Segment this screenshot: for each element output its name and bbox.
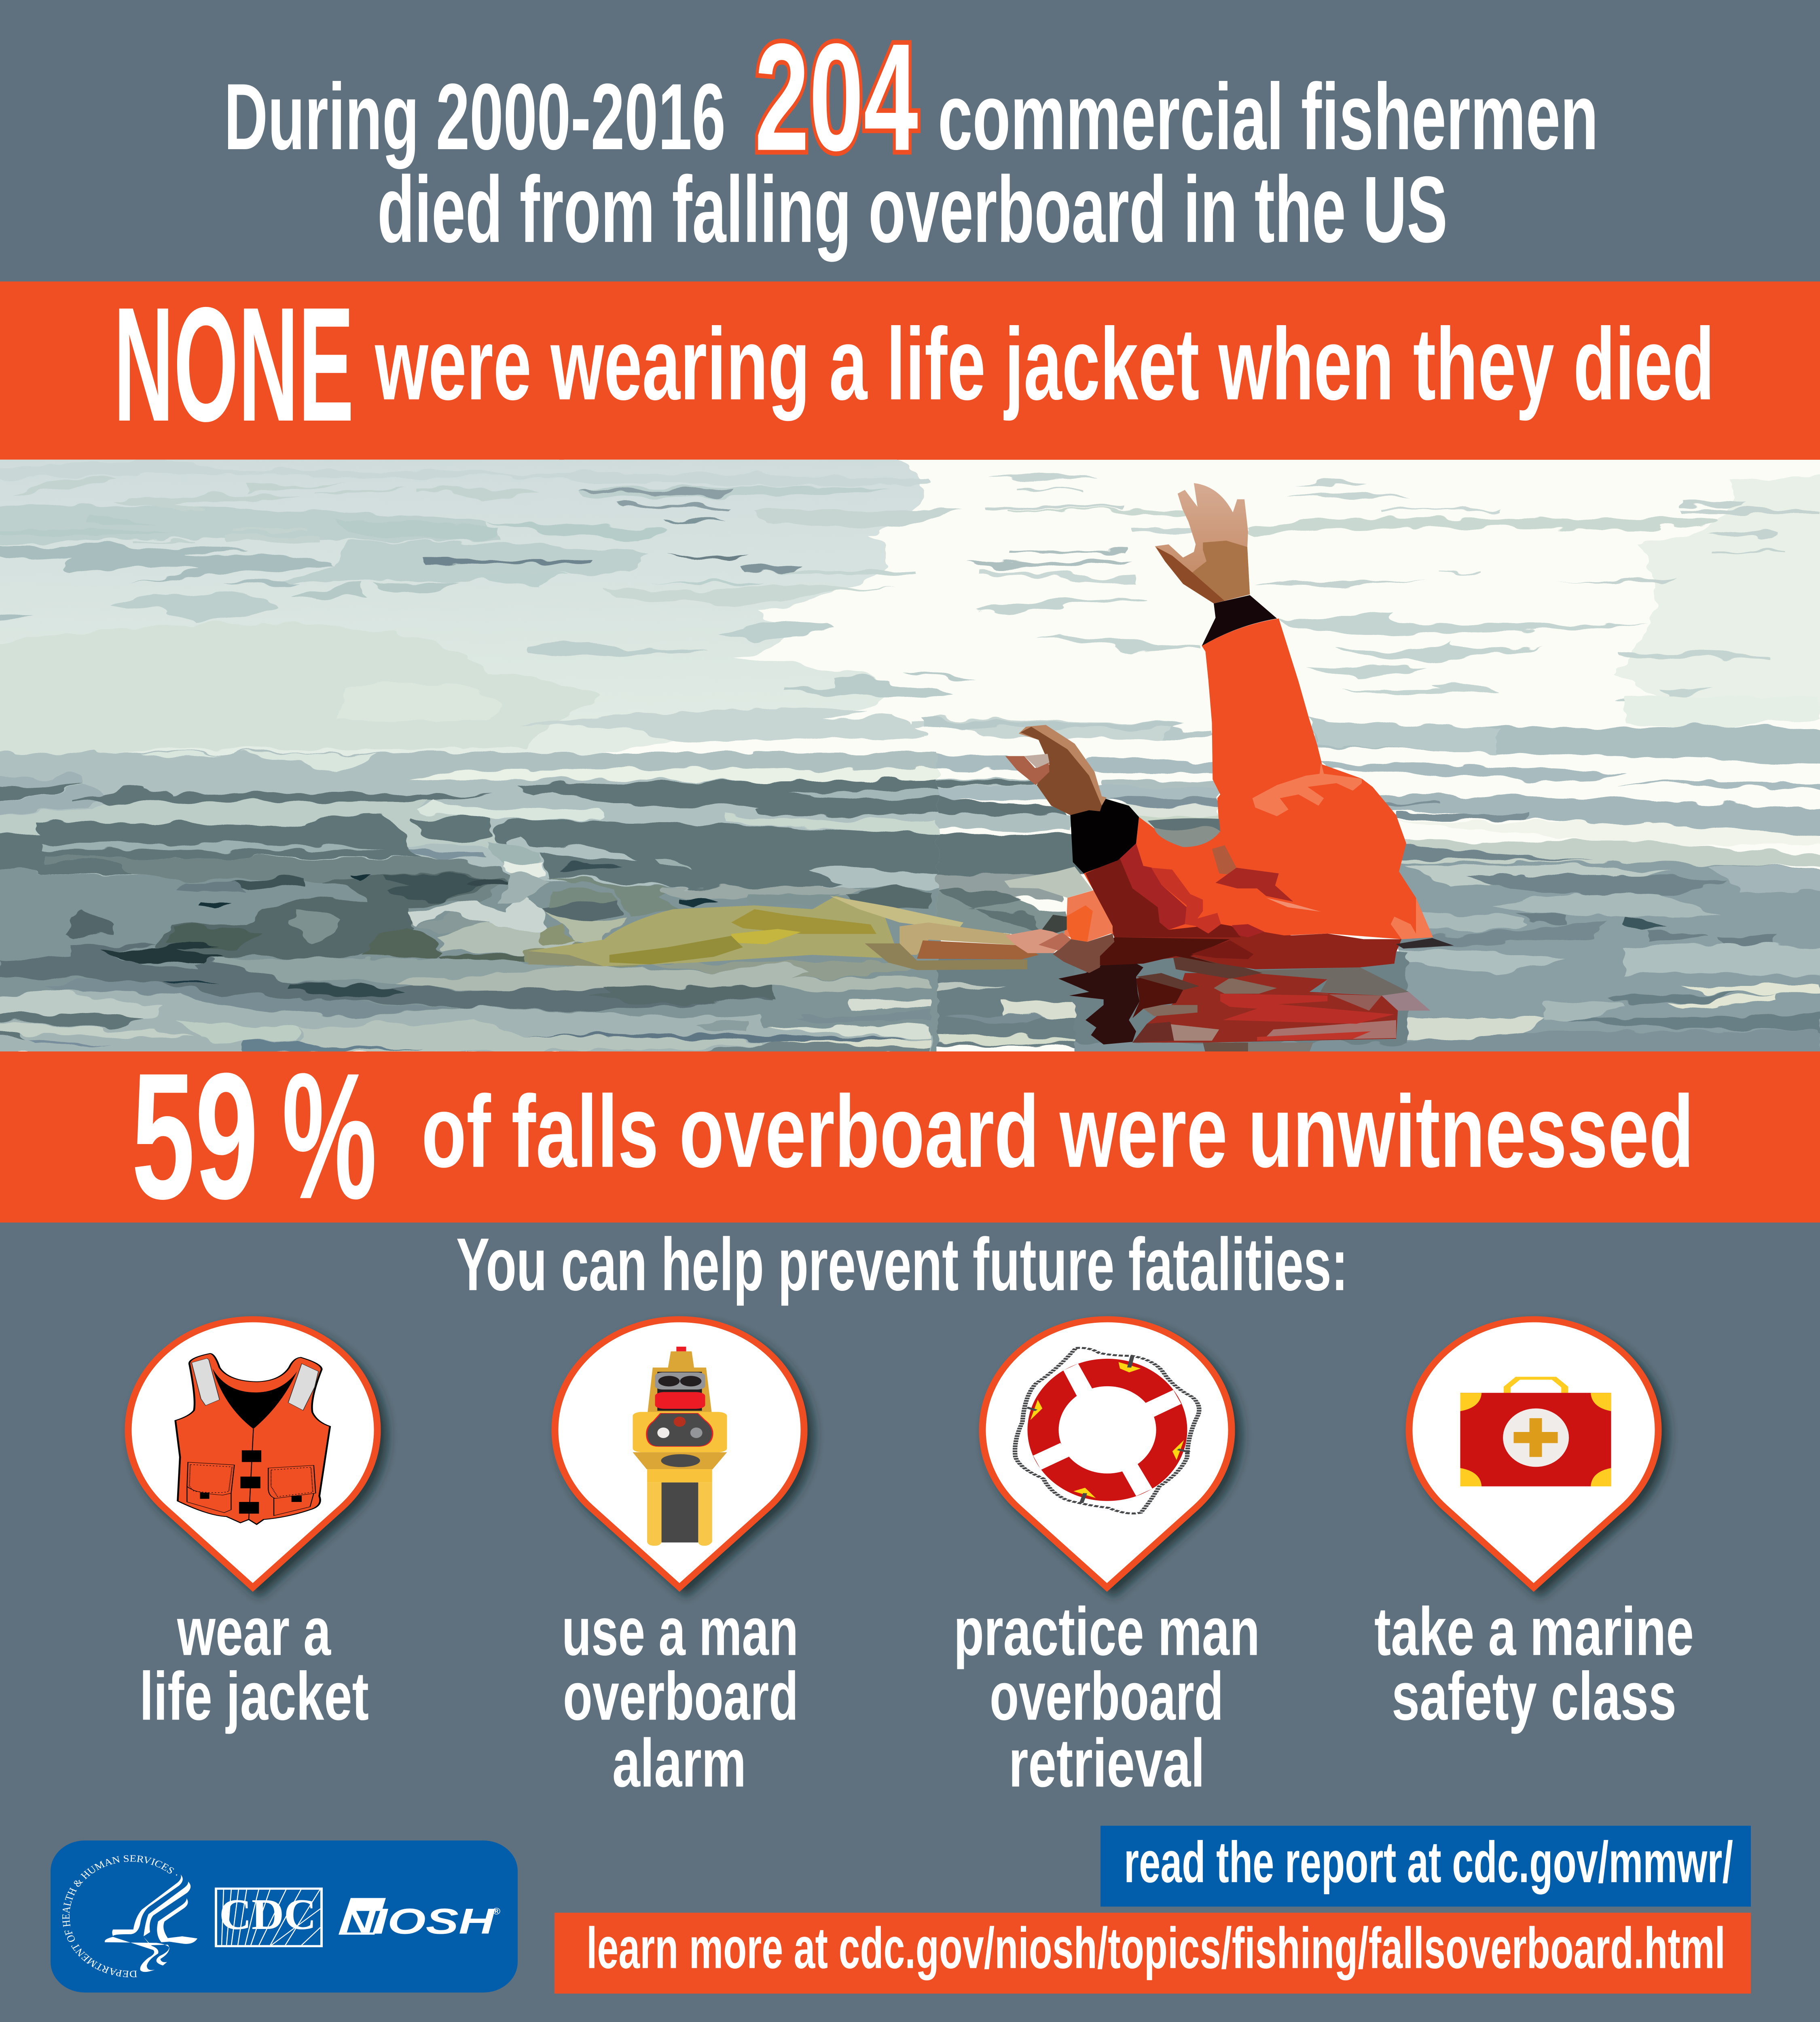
- water behind figure: [923, 717, 1508, 1062]
- banner: 59% unwitnessed: %: [282, 1036, 377, 1237]
- fisherman figure: [1004, 483, 1454, 1058]
- right side water bands: [1312, 719, 1820, 766]
- icon: alarm beacon: [633, 1347, 727, 1546]
- lower left water: [0, 753, 938, 1053]
- HHS seal: DEPARTMENT OF HEALTH & HUMAN SERVICES · USA: [0, 0, 182, 1980]
- illustration: fisherman overboard in water: [0, 456, 1820, 1062]
- upper hand: [1155, 483, 1250, 603]
- label: practice man overboard retrieval: retrieval: [1009, 1725, 1205, 1801]
- label: practice man overboard retrieval: [954, 1593, 1260, 1801]
- lower arm cuff: [1070, 798, 1139, 874]
- title headline: [224, 12, 1598, 262]
- NIOSH logo: ®: [493, 1906, 500, 1917]
- label: use a man overboard alarm: alarm: [612, 1725, 746, 1801]
- label: use a man overboard alarm: [562, 1593, 798, 1801]
- NIOSH logo: [339, 1898, 500, 1942]
- logo panel: [0, 0, 518, 1992]
- pin: overboard retrieval: [982, 1319, 1232, 1587]
- title headline: During 2000-2016: [224, 64, 726, 169]
- icon: life jacket: [176, 1354, 330, 1524]
- label: practice man overboard retrieval: practice man: [954, 1593, 1260, 1670]
- label: wear a life jacket: wear a: [177, 1593, 331, 1670]
- label: take a marine safety class: safety class: [1392, 1658, 1676, 1734]
- label: practice man overboard retrieval: overboard: [990, 1658, 1223, 1734]
- icon: life ring: [1015, 1348, 1199, 1513]
- label: use a man overboard alarm: overboard: [563, 1658, 798, 1734]
- CDC logo: CDC: [219, 1890, 316, 1938]
- body: [1100, 924, 1401, 969]
- NIOSH logo: N: [340, 1903, 377, 1940]
- reflection: [1058, 955, 1431, 1058]
- label: wear a life jacket: [140, 1593, 369, 1734]
- label: wear a life jacket: life jacket: [140, 1658, 369, 1734]
- NIOSH logo: IOSH: [374, 1901, 495, 1942]
- banner: 59% unwitnessed: 59: [131, 1036, 258, 1237]
- pin: marine safety class: [1409, 1319, 1658, 1587]
- icon: first aid kit: [1460, 1378, 1611, 1486]
- lower hand: [1019, 725, 1107, 806]
- big number 204: 204: [755, 12, 919, 182]
- pin: man overboard alarm: [555, 1319, 804, 1587]
- water surface: [0, 456, 1820, 1062]
- banner: 59% unwitnessed: [0, 1036, 1820, 1237]
- pin: life jacket: [128, 1319, 377, 1587]
- upper arm cuff: [1202, 595, 1277, 646]
- banner: none wearing life jacket: [0, 273, 1820, 460]
- banner: none wearing life jacket: NONE: [114, 273, 354, 455]
- label: take a marine safety class: [1374, 1593, 1694, 1734]
- debris: yellow rope and boards: [528, 896, 1039, 970]
- label: use a man overboard alarm: use a man: [562, 1593, 798, 1670]
